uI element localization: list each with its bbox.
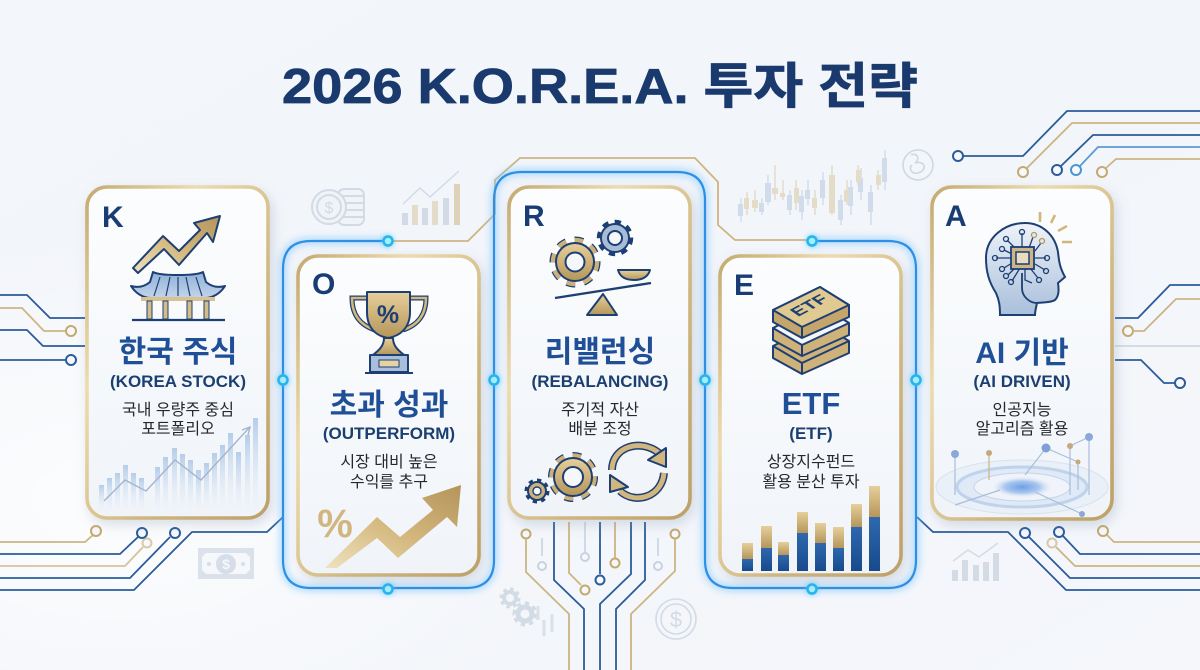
faint icon: emblem xyxy=(903,150,933,180)
icon: trophy: % xyxy=(377,301,399,329)
heading: 리밸런싱 xyxy=(545,336,655,369)
panel: K Korea stock xyxy=(87,187,268,518)
faint icon: coins: $ xyxy=(325,200,334,217)
subheading: (REBALANCING) xyxy=(532,372,668,391)
illustration: data platform xyxy=(936,433,1108,517)
circuit lines: bottom left xyxy=(0,517,283,590)
circuit lines: right xyxy=(1115,285,1200,388)
faint icon: banknote xyxy=(198,548,254,579)
subheading: (OUTPERFORM) xyxy=(323,424,455,443)
letter A: A xyxy=(945,200,967,233)
title: 2026 K.O.R.E.A. 투자 전략 xyxy=(282,60,918,114)
icon: ETF stack: ETF xyxy=(786,292,833,319)
letter K: K xyxy=(102,201,124,234)
icon: percent and gold arrow: % xyxy=(317,502,353,546)
heading: AI 기반 xyxy=(975,337,1069,370)
circuit lines: top right xyxy=(953,111,1200,177)
connector: glowing blue loop xyxy=(283,172,916,588)
faint icon: small bar chart xyxy=(952,543,999,581)
letter E: E xyxy=(734,269,754,302)
description: 상장지수펀드 xyxy=(767,453,855,471)
description line 2: 배분 조정 xyxy=(568,420,632,438)
description: 주기적 자산 xyxy=(561,401,639,419)
panel: E ETF xyxy=(720,256,901,575)
panel: O outperform xyxy=(298,256,479,575)
icon: trophy xyxy=(352,292,426,373)
letter O: O xyxy=(312,268,335,301)
heading: ETF xyxy=(782,386,840,421)
subheading: (ETF) xyxy=(789,424,833,443)
description line 2: 알고리즘 활용 xyxy=(976,420,1068,438)
icon: gears and cycle arrows xyxy=(526,446,666,502)
description line 2: 포트폴리오 xyxy=(141,420,215,438)
connector nodes xyxy=(278,236,920,594)
chart: pale bars and line xyxy=(99,418,258,510)
letter R: R xyxy=(523,200,545,233)
faint icon: dollar coin: $ xyxy=(670,607,682,632)
connector: gold link between loops xyxy=(388,158,812,241)
description: 시장 대비 높은 xyxy=(340,453,438,471)
faint icon: gears and candles xyxy=(501,589,552,636)
heading: 한국 주식 xyxy=(119,336,237,369)
description line 2: 활용 분산 투자 xyxy=(762,473,860,491)
circuit lines: bottom right xyxy=(917,517,1200,590)
subheading: (KOREA STOCK) xyxy=(110,372,246,391)
heading: 초과 성과 xyxy=(330,389,448,422)
panel: R rebalancing xyxy=(509,187,690,518)
description: 인공지능 xyxy=(993,401,1051,419)
faint icon: candlestick chart xyxy=(738,150,887,225)
faint icon: rising bars xyxy=(402,171,460,225)
circuit lines: left xyxy=(0,295,85,365)
panel: A AI driven xyxy=(932,187,1112,519)
faint icon: dollar coin xyxy=(656,599,696,639)
icon: percent and gold arrow xyxy=(317,485,461,568)
icon: ETF stack xyxy=(773,287,849,374)
icon: AI head xyxy=(986,212,1072,315)
icon: arrow over hanok roof xyxy=(131,216,225,320)
circuit lines: bottom centre xyxy=(522,522,680,670)
description line 2: 수익를 추구 xyxy=(350,473,428,491)
faint icon: coins xyxy=(312,189,364,225)
faint icon: banknote: $ xyxy=(222,556,230,572)
subheading: (AI DRIVEN) xyxy=(973,372,1071,391)
icon: gears and scale xyxy=(553,222,651,315)
chart: stacked bars xyxy=(742,486,880,571)
description: 국내 우량주 중심 xyxy=(122,401,234,419)
